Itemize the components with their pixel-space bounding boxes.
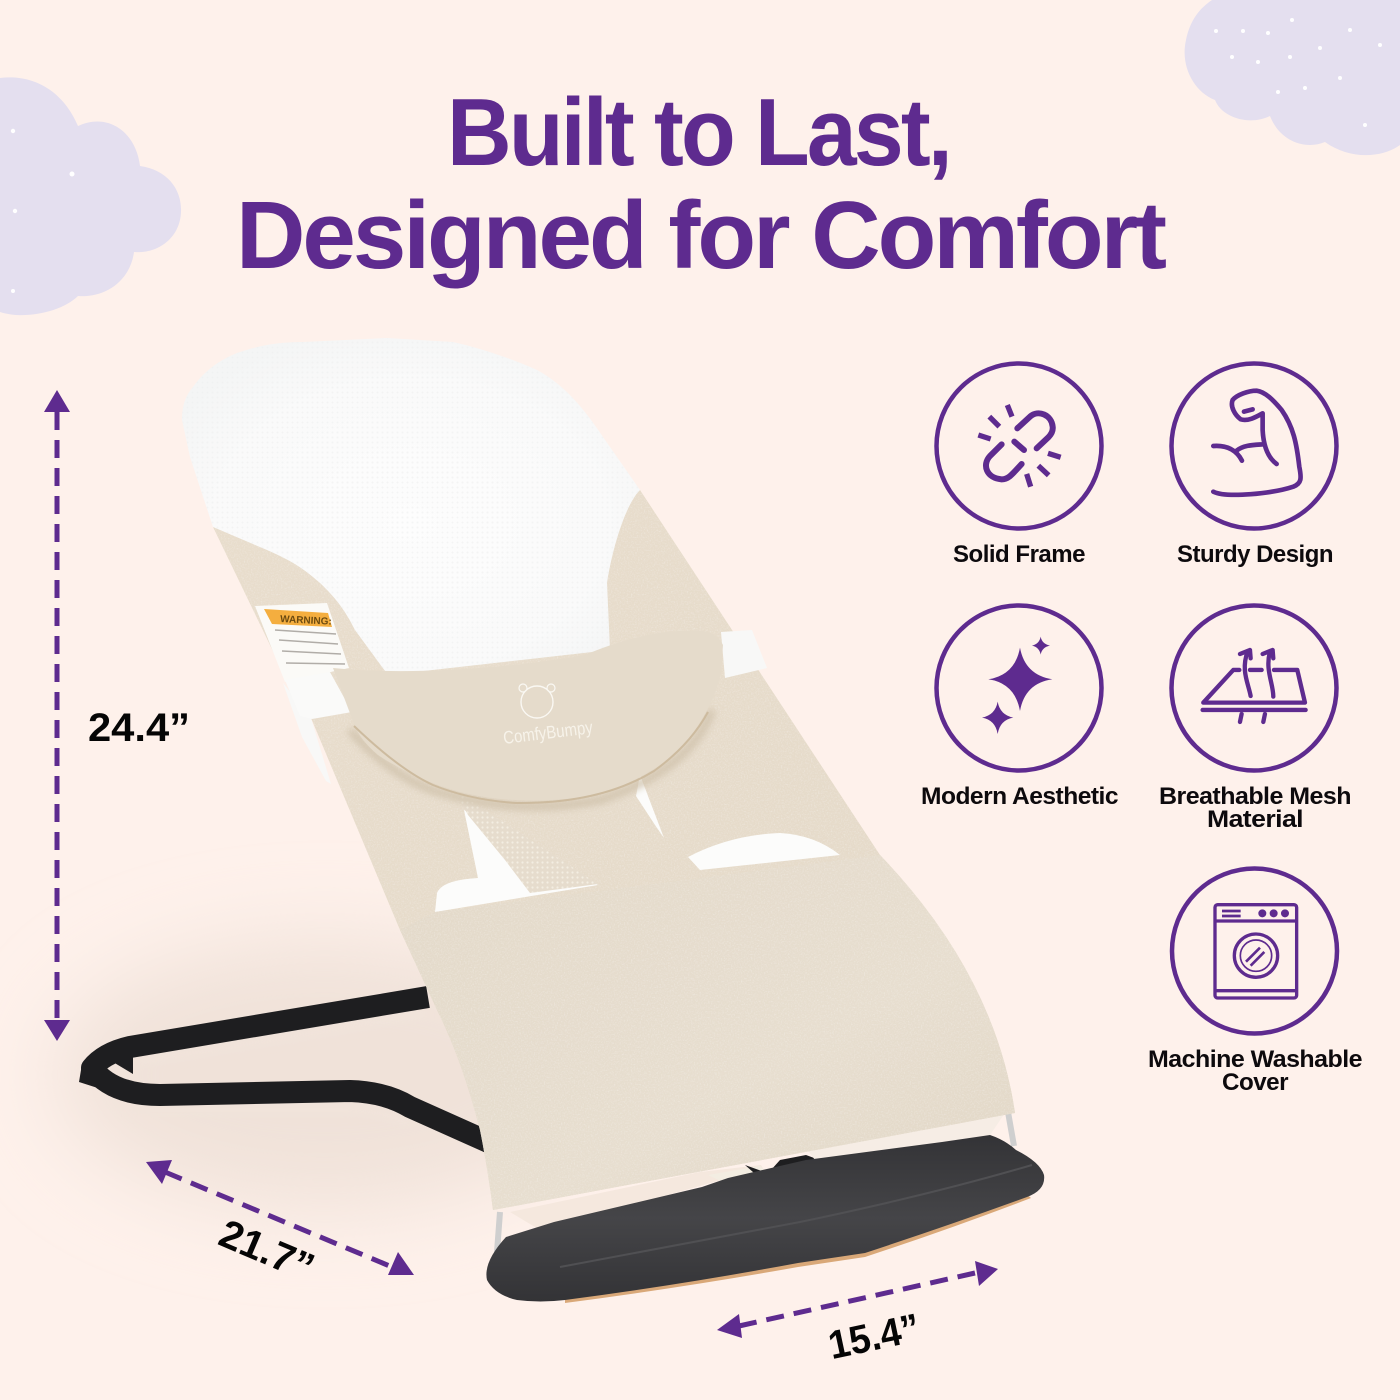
label: machine washable cover: [1148, 1046, 1362, 1096]
seat fabric body: [213, 490, 1015, 1210]
icon: breathable mesh: [1172, 606, 1336, 770]
label: sturdy design: Sturdy Design: [1177, 541, 1333, 568]
title: Designed for Comfort: [236, 182, 1166, 289]
label: machine washable cover: Cover: [1222, 1069, 1288, 1096]
label: modern aesthetic: Modern Aesthetic: [921, 783, 1118, 810]
pocket panel: [400, 855, 1015, 1210]
white mesh headrest: [182, 338, 640, 675]
label: breathable mesh material: Material: [1207, 806, 1303, 833]
icon: solid frame: [936, 364, 1102, 528]
cloud: top left: [0, 77, 181, 315]
bouncer wire frame: [79, 997, 495, 1145]
height label: 24.4”: [88, 706, 190, 750]
width arrow: [146, 1160, 414, 1275]
left mesh band: [454, 790, 598, 893]
label: solid frame: Solid Frame: [953, 541, 1085, 568]
right white opening: [688, 833, 840, 870]
chrome supports: [497, 1112, 1014, 1252]
left strap: [285, 672, 352, 719]
depth arrow: [717, 1261, 998, 1338]
icon: sturdy design: [1172, 364, 1336, 528]
product: baby bouncer: [79, 338, 1044, 1303]
white mesh under strap: [283, 683, 331, 784]
warning label: WARNING:: [280, 614, 332, 628]
title: Built to Last,: [447, 79, 950, 186]
icon: machine washable: [1172, 868, 1337, 1034]
left white opening: [435, 810, 598, 912]
height arrow: [44, 390, 70, 1041]
right strap: [721, 630, 767, 678]
label: machine washable cover: Machine Washable: [1148, 1046, 1362, 1073]
width label: 21.7”: [213, 1212, 320, 1290]
depth label: 15.4”: [825, 1306, 924, 1368]
title: [236, 79, 1166, 289]
headrest pad with logo: [333, 631, 723, 806]
right white slit: [636, 775, 664, 838]
floor shadow: [55, 940, 595, 1210]
warning label: [255, 603, 349, 682]
label: breathable mesh material: [1159, 783, 1351, 833]
foot plate: [486, 1112, 1044, 1303]
seat cutouts: [435, 775, 840, 912]
label: breathable mesh material: Breathable Mesh: [1159, 783, 1351, 810]
under-seat reflection: [510, 1165, 772, 1230]
cloud: top right: [1185, 0, 1400, 155]
brand logo: ComfyBumpy: [502, 717, 594, 748]
icon: modern aesthetic: [936, 606, 1102, 770]
brand logo: [502, 684, 594, 748]
